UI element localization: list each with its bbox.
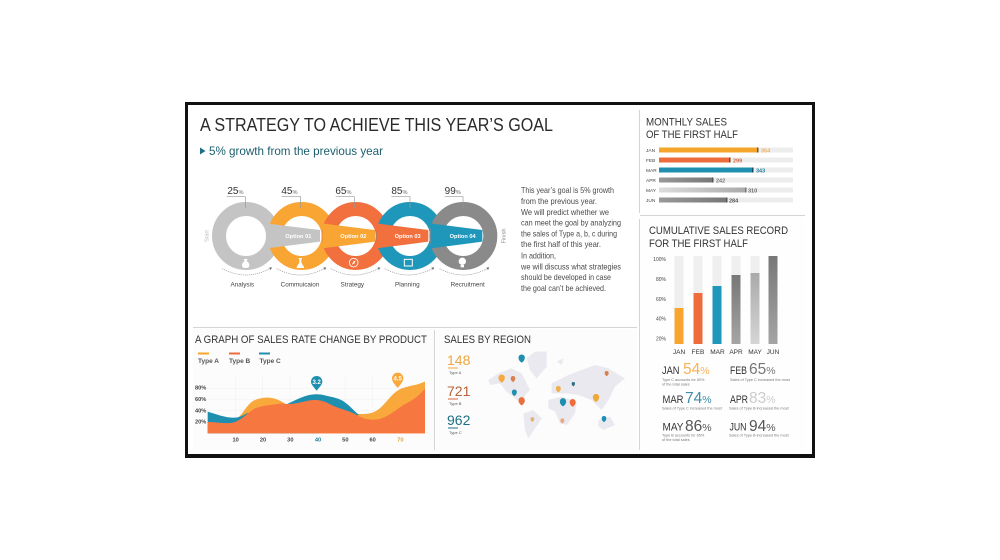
percent callouts: 65% bbox=[335, 186, 351, 197]
paragraph bbox=[520, 185, 621, 293]
x axis labels: 20 bbox=[260, 438, 266, 444]
paragraph: This year’s goal is 5% growth bbox=[521, 185, 614, 195]
heading: cumulative sales bbox=[649, 225, 788, 250]
percent callouts: 99% bbox=[445, 186, 461, 197]
marker: 3.2: 3.2 bbox=[313, 380, 321, 386]
ring: Analysis bbox=[205, 209, 273, 263]
step labels: Recruitment bbox=[451, 281, 485, 288]
bars bbox=[659, 148, 758, 202]
region totals: 148 bbox=[447, 352, 471, 368]
heading: sales by region: SALES BY REGION bbox=[444, 334, 531, 346]
heading: cumulative sales: CUMULATIVE SALES RECORD bbox=[649, 225, 788, 237]
month labels: APR bbox=[646, 178, 656, 184]
percent callouts: 45% bbox=[281, 186, 297, 197]
x axis labels: 30 bbox=[287, 438, 293, 444]
band: Option 03: Option 03 bbox=[395, 234, 421, 240]
band: Option 02: Option 02 bbox=[340, 234, 366, 240]
monthly stats: APR bbox=[730, 394, 748, 406]
monthly stats: Sales of Type B increased the most bbox=[729, 434, 790, 438]
region totals: 962 bbox=[447, 412, 471, 428]
paragraph: We will predict whether we bbox=[521, 207, 609, 217]
paragraph: can meet the goal by analyzing bbox=[521, 218, 621, 228]
monthly stats: of the total sales bbox=[662, 382, 690, 386]
values: 242 bbox=[716, 178, 725, 184]
ring: Communication bbox=[275, 209, 329, 263]
region totals: Type B bbox=[449, 401, 462, 406]
y axis labels: 60% bbox=[195, 397, 206, 403]
area: type C bbox=[208, 394, 359, 433]
ring process diagram bbox=[205, 186, 507, 288]
y axis labels: 20% bbox=[195, 420, 206, 426]
legend bbox=[198, 352, 281, 365]
icon: money bag bbox=[242, 259, 249, 268]
column chart: FEB bbox=[692, 349, 704, 356]
x axis labels: 60 bbox=[370, 438, 376, 444]
panel: sales rate change bbox=[195, 334, 427, 444]
area chart bbox=[195, 373, 425, 444]
ring: Planning bbox=[383, 209, 437, 263]
monthly stats: Sales of Type C increased the most bbox=[730, 378, 791, 382]
screen frame bbox=[185, 102, 815, 458]
monthly stats: Sales of Type C increased the most bbox=[662, 406, 723, 410]
y axis labels: 80% bbox=[195, 385, 206, 391]
x axis labels: 70 bbox=[397, 438, 403, 444]
paragraph: the goal can’t be achieved. bbox=[521, 283, 606, 293]
values: 354 bbox=[761, 148, 771, 154]
column chart: 80% bbox=[656, 277, 667, 283]
icon: compass bbox=[349, 258, 358, 267]
area: type B bbox=[208, 388, 425, 433]
band: Option 01 bbox=[267, 223, 320, 248]
column chart: 60% bbox=[656, 297, 667, 303]
column chart: 20% bbox=[656, 336, 667, 342]
month labels: MAR bbox=[646, 168, 657, 174]
icon: flask bbox=[297, 258, 304, 268]
monthly stats: 65% bbox=[749, 361, 776, 378]
percent callouts bbox=[227, 186, 463, 208]
paragraph: In addition, bbox=[521, 250, 556, 260]
x axis labels: 10 bbox=[233, 438, 239, 444]
band: Option 04: Option 04 bbox=[450, 234, 477, 240]
paragraph: should be developed in case bbox=[521, 272, 611, 282]
month labels: JAN bbox=[646, 148, 656, 154]
step labels: Strategy bbox=[341, 281, 365, 288]
band: Option 01: Option 01 bbox=[285, 234, 311, 240]
column chart: APR bbox=[729, 349, 743, 356]
region totals: 721 bbox=[447, 383, 471, 399]
map pins bbox=[498, 354, 609, 424]
monthly stats: 94% bbox=[749, 418, 776, 435]
ring: Recruitment bbox=[436, 209, 490, 263]
monthly stats: Type B accounts for 65% bbox=[662, 434, 705, 438]
dotted arrows bbox=[222, 267, 489, 275]
legend: Type C bbox=[260, 358, 281, 365]
monthly stats: JUN bbox=[730, 422, 747, 434]
column chart: 40% bbox=[656, 316, 667, 322]
percent callouts: 25% bbox=[227, 186, 243, 197]
marker: 4.5: 4.5 bbox=[394, 377, 402, 383]
values: 284 bbox=[729, 198, 739, 204]
panel: sales by region bbox=[444, 334, 625, 438]
step labels: Planning bbox=[395, 281, 420, 288]
values: 299 bbox=[733, 158, 742, 164]
monthly stats bbox=[662, 361, 791, 442]
area: type A bbox=[235, 381, 425, 433]
heading: monthly sales bbox=[646, 116, 738, 141]
column chart bbox=[653, 256, 780, 356]
x axis labels: 40 bbox=[315, 438, 321, 444]
monthly stats: of the total sales bbox=[662, 438, 690, 442]
title: A STRATEGY TO ACHIEVE THIS YEAR’S GOAL bbox=[200, 114, 553, 135]
monthly stats: JAN bbox=[662, 365, 680, 377]
label: Finish: Finish bbox=[501, 228, 507, 244]
x axis labels: 50 bbox=[342, 438, 348, 444]
step labels: Analysis bbox=[231, 281, 254, 288]
heading: monthly sales: OF THE FIRST HALF bbox=[646, 129, 738, 141]
heading: cumulative sales: FOR THE FIRST HALF bbox=[649, 238, 748, 250]
marker: 3.2 bbox=[311, 376, 322, 391]
monthly stats: 86% bbox=[685, 418, 712, 435]
monthly stats: MAR bbox=[662, 394, 684, 406]
icon: light bulb bbox=[459, 258, 466, 267]
monthly stats: MAY bbox=[662, 422, 684, 434]
subtitle with arrow: 5% growth from the previous year bbox=[209, 144, 383, 158]
heading: monthly sales: MONTHLY SALES bbox=[646, 116, 727, 128]
icon: calendar bbox=[404, 259, 412, 266]
panel: cumulative sales bbox=[649, 225, 791, 442]
month labels: MAY bbox=[646, 188, 657, 194]
step labels bbox=[231, 281, 485, 288]
column chart: JUN bbox=[767, 349, 780, 356]
column chart: 100% bbox=[653, 257, 667, 263]
heading: sales rate change: A GRAPH OF SALES RATE CHANGE BY PRODUCT bbox=[195, 334, 427, 346]
monthly stats: FEB bbox=[730, 365, 747, 377]
column chart: JAN bbox=[673, 349, 685, 356]
y axis labels: 40% bbox=[195, 408, 206, 414]
paragraph: the first half of this year. bbox=[521, 239, 601, 249]
paragraph: we will discuss what strategies bbox=[520, 262, 621, 272]
region totals: Type A bbox=[449, 370, 462, 375]
ring: Strategy bbox=[329, 209, 383, 263]
step labels: Commuicaion bbox=[281, 281, 320, 288]
month labels bbox=[646, 148, 657, 204]
marker: 4.5 bbox=[392, 373, 403, 388]
percent callouts: 85% bbox=[391, 186, 407, 197]
paragraph: from the previous year. bbox=[521, 196, 597, 206]
monthly stats: Type C accounts for 50% bbox=[662, 378, 705, 382]
world map bbox=[488, 352, 625, 438]
column chart: MAY bbox=[748, 349, 762, 356]
monthly stats: Sales of Type B increased the most bbox=[729, 406, 790, 410]
y axis labels bbox=[195, 385, 206, 426]
values: 343 bbox=[756, 168, 765, 174]
column chart: MAR bbox=[710, 349, 725, 356]
legend: Type A bbox=[198, 358, 219, 365]
region totals bbox=[447, 352, 471, 435]
monthly stats: 54% bbox=[683, 361, 710, 378]
month labels: FEB bbox=[646, 158, 655, 164]
band: Option 03 bbox=[376, 223, 428, 248]
ring: Analysis: Start bbox=[205, 230, 211, 242]
band: Option 04 bbox=[431, 223, 482, 248]
band: Option 02 bbox=[322, 223, 375, 248]
values bbox=[716, 148, 771, 204]
monthly stats: 74% bbox=[685, 390, 712, 407]
month labels: JUN bbox=[646, 198, 656, 204]
bar tracks bbox=[659, 148, 793, 202]
region totals: Type C bbox=[449, 430, 462, 435]
legend: Type B bbox=[229, 358, 250, 365]
monthly stats: 83% bbox=[749, 390, 776, 407]
panel: monthly sales bbox=[646, 116, 793, 204]
values: 310 bbox=[748, 188, 757, 194]
icons on rings bbox=[242, 258, 466, 268]
x axis labels bbox=[233, 438, 403, 444]
paragraph: the sales of Type a, b, c during bbox=[521, 228, 617, 238]
